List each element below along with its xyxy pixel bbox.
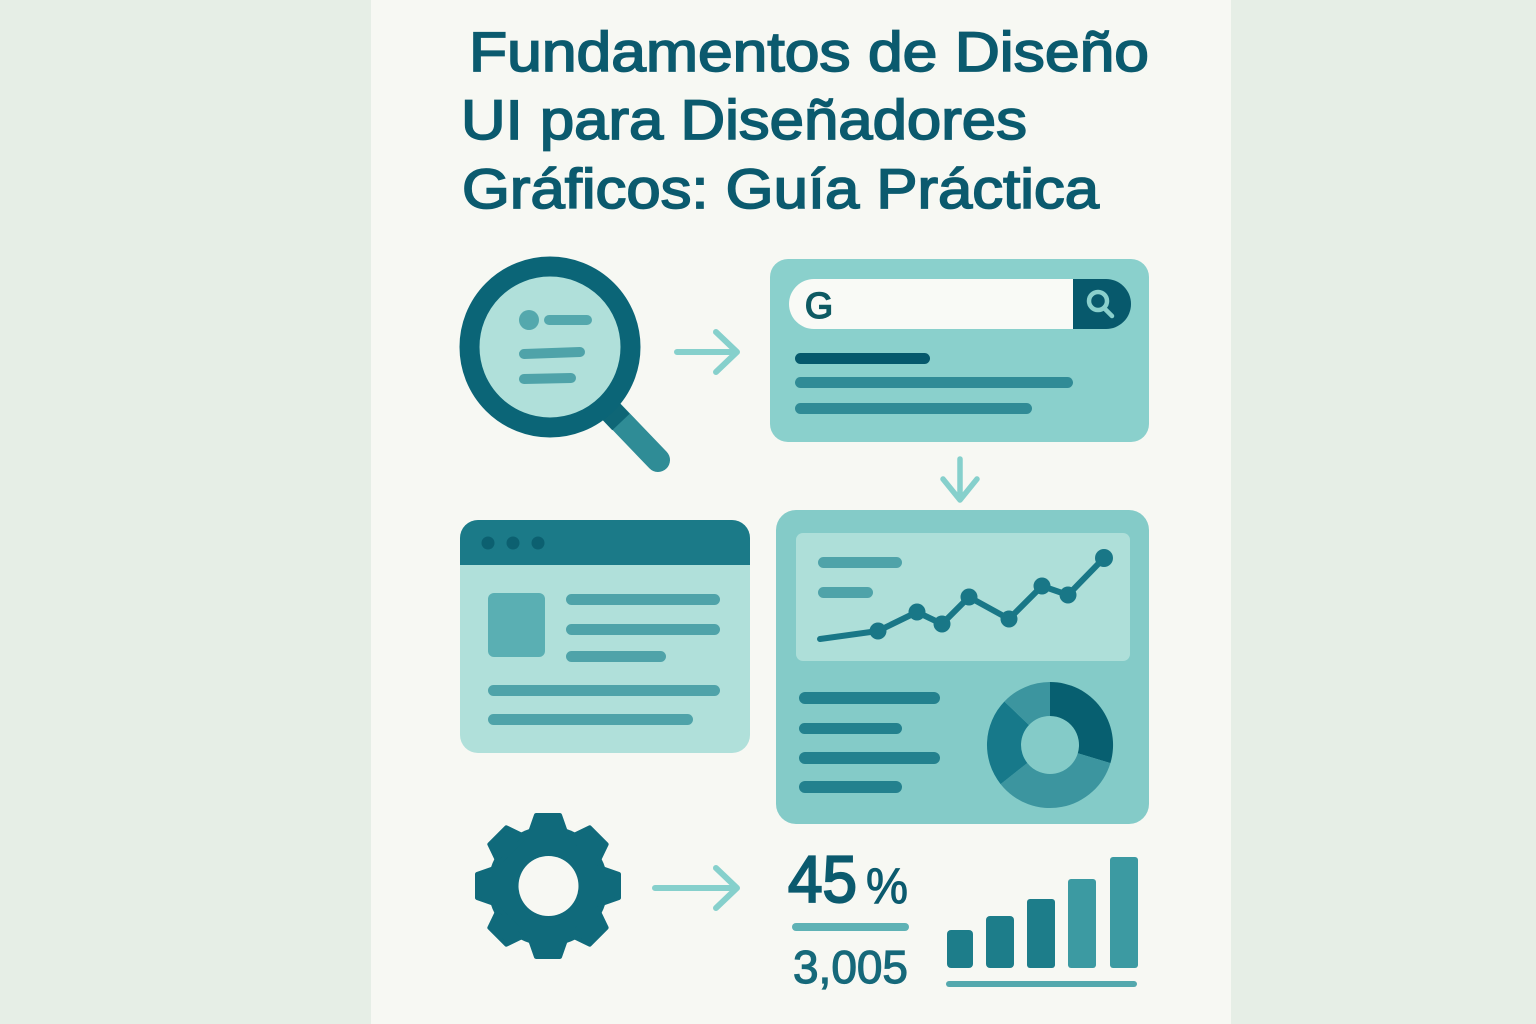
panel: browser window (460, 520, 750, 753)
metric: 3,005: 3,005 (793, 941, 908, 993)
title (461, 20, 1149, 220)
icon: gear (477, 815, 619, 957)
metric divider (792, 923, 909, 931)
dashboard text lines (799, 692, 940, 793)
title: Gráficos: Guía Práctica (462, 157, 1100, 220)
arrow: magnifier to search (677, 332, 737, 372)
title: UI para Diseñadores (461, 88, 1027, 151)
line chart (796, 533, 1130, 661)
arrow: gear to metrics (655, 868, 737, 908)
metric: 45 percent (788, 842, 908, 916)
arrow: search to dashboard (943, 459, 977, 500)
donut chart (987, 682, 1113, 808)
search bar (789, 279, 1131, 329)
icon: magnifying glass (470, 266, 658, 460)
metric: 45 percent: % (866, 858, 908, 914)
bar chart (946, 857, 1138, 987)
search bar: G (805, 285, 833, 326)
panel: search results card (770, 259, 1149, 442)
panel: analytics dashboard (776, 510, 1149, 824)
center page panel (371, 0, 1231, 1024)
metric: 45 percent: 45 (788, 842, 857, 916)
title: Fundamentos de Diseño (469, 20, 1149, 83)
